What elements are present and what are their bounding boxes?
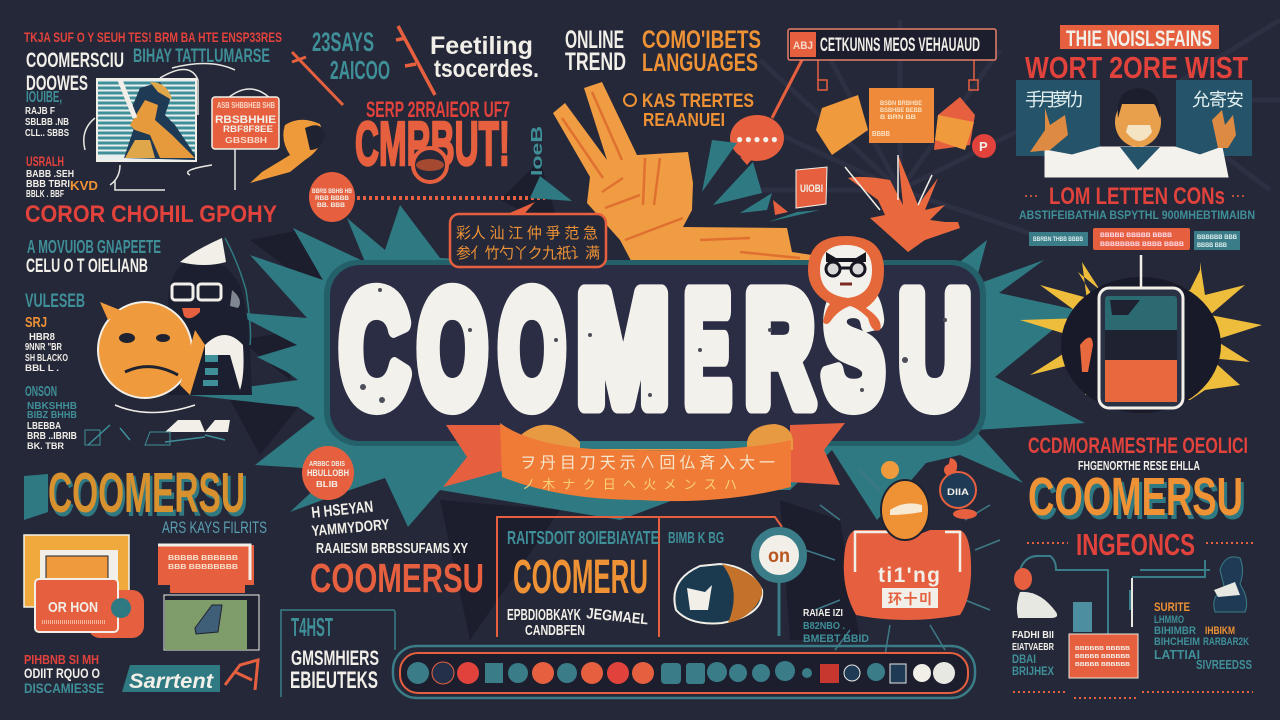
bottom left wordmark: COOMERSU (50, 464, 248, 529)
panel: centre orange wordmark (497, 517, 782, 639)
right text block: LOM LETTEN CONs (1049, 183, 1225, 210)
bottom left notes: DISCAMIE3SE (24, 680, 104, 696)
right lower text notes: SIVREEDSS (1196, 657, 1252, 672)
right text block: ABSTIFEIBATHIA BSPYTHL 900MHEBTIMAIBN (1019, 208, 1255, 222)
main title: S (823, 259, 884, 438)
red bubble with dotted arrow: BB. BBB (317, 203, 346, 209)
bottom left wordmark: COOMERSU (48, 461, 245, 525)
top text: Feetiling (430, 32, 539, 83)
header notes top left: TKJA SUF O Y SEUH TES! BRM BA HTE ENSP33RES (24, 29, 282, 45)
orange info card (1069, 602, 1138, 678)
text notes left: BABB .SEH (26, 169, 74, 180)
text block under heading: NBKSHHB (27, 401, 77, 412)
centre-left slanted text: COOMERSU (310, 555, 484, 601)
panel: THIST: T4HST (291, 612, 333, 642)
orange character with sign (805, 458, 1000, 655)
red dot and tag: P (979, 139, 988, 154)
red note bubble: ARBBC DBIS (309, 461, 345, 468)
top text: languages: REAANUEI (643, 110, 725, 130)
red sign panel (212, 89, 279, 149)
burst headline: CMRBUT! (355, 110, 510, 179)
photo panel (97, 79, 196, 161)
right lower text notes: FADHI BII (1012, 630, 1054, 641)
text notes left: BBLK . BBF (26, 189, 64, 200)
text block under heading: LBEBBA (27, 421, 61, 432)
header bar with legs (772, 29, 996, 118)
three info boxes: BBBB BBB (1197, 243, 1228, 249)
right lower text notes (1012, 600, 1252, 678)
main title: R (745, 259, 814, 438)
three info boxes: BBBBBB BBB (1197, 235, 1238, 241)
panel: THIST (281, 610, 395, 697)
Sarrtent badge: Sarrtent (129, 670, 214, 693)
panel: yellow and coral tablet (24, 535, 144, 638)
panel: chat circle (668, 530, 803, 636)
centre-left slanted text: RAAIESM BRBSSUFAMS XY (316, 540, 468, 557)
document icons: BBBB (872, 131, 890, 138)
section heading: COROR CHOHIL GPOHY (25, 201, 277, 228)
bottom left notes: PIHBNB SI MH (24, 652, 99, 667)
people and connectors (1014, 556, 1247, 640)
text notes left: IOUIBE, (26, 89, 62, 106)
panel: coral and green stack: BBB BBBBBBBB (168, 564, 238, 571)
top text: languages: COMO'IBETS (642, 26, 761, 54)
red sign panel: GBSB8H (225, 136, 267, 145)
panel: centre orange wordmark: EPBDIOBKAYK (507, 607, 581, 624)
document icons: B BRN BB (880, 115, 917, 121)
top text: languages: KAS TRERTES (642, 91, 754, 112)
text notes left: RAJB F (25, 106, 55, 117)
side label: IoeB (529, 126, 546, 176)
central starburst (188, 205, 1085, 527)
text notes left (25, 89, 98, 200)
person panel: 手月 萝 仂 (1025, 90, 1083, 110)
person panel (1016, 80, 1252, 177)
text block under heading: BRB ..IBRIB (27, 431, 77, 442)
document icons: BSBN BRBHBE (880, 101, 922, 107)
small note by character (803, 608, 869, 645)
small note by character: BMEBT BBID (803, 633, 869, 645)
panel: chat circle: BIMB K BG (668, 530, 724, 547)
centre-left slanted text: YAMMYDORY (311, 516, 390, 540)
three info boxes: BBBBBBBB BBBB BBBB (1100, 242, 1185, 248)
main title (324, 259, 986, 446)
three info boxes: BBBBB BBBBB BBBB (1100, 233, 1173, 239)
centre-left slanted text: H HSEYAN (311, 499, 374, 522)
speech bubble: ●●●●● (736, 132, 778, 146)
teal shards (702, 140, 820, 222)
coral hand (845, 155, 960, 252)
panel: centre orange wordmark: CANDBFEN (525, 622, 585, 639)
orange character with sign: DIIA (947, 487, 970, 497)
document icons: BSBHBE BEBB (880, 108, 923, 114)
right lower headline: FHGENORTHE RESE EHLLA (1078, 458, 1200, 473)
orange character with sign: 环 十 미 (888, 591, 932, 607)
text block under heading: VULESEB (25, 291, 85, 312)
red note bubble (302, 446, 354, 500)
right lower text notes: LHMMO (1154, 614, 1184, 626)
orange info card: BBBBBB BBBBB (1075, 646, 1131, 652)
red sign panel: RBF8F8EE (223, 124, 273, 134)
right lower text notes: LATTIAI (1154, 647, 1200, 662)
icon bar (393, 646, 975, 698)
orange hand doodle (250, 120, 325, 183)
right lower text notes: SURITE (1154, 600, 1190, 614)
section heading: ingeoncs (1013, 527, 1253, 698)
red dot and tag: UIOBI (800, 183, 823, 195)
header notes top left: COOMERSCIU (26, 49, 124, 72)
orange character with sign: ti1'ng (878, 564, 940, 587)
top text: online trend: TREND (565, 48, 626, 76)
text block under heading: BK. TBR (27, 441, 65, 451)
mascot with glasses on title (808, 236, 884, 331)
text notes left: BBB TBRI (26, 179, 70, 190)
text notes left: SBLBB .NB (25, 117, 69, 128)
header notes top left: DOOWES (26, 72, 88, 95)
main title: C (340, 259, 409, 438)
right lower text notes: EIATVAEBR (1012, 642, 1055, 653)
right lower text notes: IHBIKM (1205, 625, 1235, 637)
main title: M (577, 259, 669, 438)
main title: O (499, 259, 565, 438)
red sign panel: RBSBHHIE (215, 114, 276, 126)
text block under heading: CELU O T OIELIANB (26, 256, 148, 277)
panel: coral and green stack: BBBBB BBBBBB (168, 555, 238, 562)
bottom left notes (24, 652, 104, 696)
red dot and tag (796, 134, 996, 208)
top text: online trend (565, 26, 626, 76)
main title: U (899, 259, 971, 438)
top centre figures: 2AICOO (330, 55, 390, 85)
red bubble with dotted arrow (309, 172, 572, 222)
header notes top left (24, 29, 282, 95)
ribbon: ノ 木 ナ ク 日 ヘ 火 メ ン ス ハ (522, 477, 737, 492)
panel: centre orange wordmark: COOMERU (513, 551, 648, 604)
text notes left: CLL.. SBBS (25, 128, 69, 139)
burst headline: SERP 2RRAIEOR UF7 (366, 97, 510, 122)
character with glasses and orange blob (85, 238, 252, 445)
right lower text notes: BIHCHEIM (1154, 636, 1200, 648)
bottom left notes: ODIIT RQUO O (24, 665, 100, 681)
right lower headline (1028, 433, 1248, 531)
three info boxes (1029, 228, 1240, 250)
right lower text notes: RARBAR2K (1203, 636, 1249, 648)
text block under heading: HBR8 (29, 332, 55, 343)
text block under heading: BIBZ BHHB (27, 410, 77, 421)
text block under heading: BBL L . (25, 363, 59, 373)
top centre figures: 23SAYS (312, 27, 374, 57)
bottom left wordmark: ARS KAYS FILRITS (162, 518, 267, 537)
red bubble with dotted arrow: RBB BBBB (315, 196, 350, 202)
three info boxes: BBRBN THBB BBBB (1033, 237, 1084, 243)
document icons (816, 88, 975, 155)
big orange hand (553, 82, 812, 273)
bottom left wordmark (24, 461, 267, 537)
small note by character: RAIAE IZI (803, 608, 843, 619)
top text: online trend: ONLINE (565, 26, 624, 54)
panel: yellow and coral tablet: OR HON (48, 599, 98, 616)
header notes top left: BIHAY TATTLUMARSE (133, 46, 270, 67)
orange info card: BBBBB BBBBBB (1075, 654, 1131, 660)
CJK callout box: 彩人 汕 江 仲 爭 范 急 (456, 225, 598, 242)
text block under heading (25, 237, 161, 451)
right lower text notes: BIHIMBR (1154, 625, 1196, 637)
centre-left slanted text (310, 499, 484, 601)
CJK callout box: 参 亻 竹 勺 丫 ク 九 祇 讠 满 (456, 245, 600, 262)
panel: centre orange wordmark: JEGMAEL (586, 605, 649, 628)
CJK callout box (450, 202, 606, 267)
ribbon (443, 423, 845, 501)
text block under heading: SRJ (25, 314, 47, 331)
text notes left: USRALH (26, 153, 64, 169)
line doodles (84, 63, 235, 190)
top text: Feetiling: Feetiling (430, 32, 533, 60)
title tag right: THIE NOISLSFAINS (1066, 26, 1212, 51)
panel: centre orange wordmark: RAITSDOIT 8OIEBIAYATE (507, 528, 659, 548)
text block under heading: 9NNR "BR (25, 342, 63, 353)
header bar with legs: CETKUNNS MEOS VEHAUAUD (820, 35, 980, 56)
small note by character: B82NBO . (803, 621, 845, 632)
Sarrtent badge (122, 660, 258, 693)
main title: O (418, 259, 487, 438)
header bar with legs: ABJ (793, 40, 813, 52)
top text: languages: LANGUAGES (642, 49, 758, 77)
red sign panel: ASB SHBBHEB SHB (217, 101, 275, 110)
red note bubble: BLIB (316, 480, 338, 489)
right lower text notes: BRIJHEX (1012, 664, 1054, 678)
section heading: ingeoncs: INGEONCS (1076, 527, 1195, 562)
orange info card: BBBBB BBBBBB (1075, 662, 1131, 668)
red note bubble: HBULLOBH (307, 468, 349, 478)
red bubble with dotted arrow: BBRB BBHB HB (312, 189, 353, 195)
text notes left: KVD (70, 178, 98, 193)
top text: languages (624, 26, 761, 130)
panel: chat circle: on (768, 546, 790, 567)
ribbon: ヲ 丹 目 刀 天 示 ∧ 回 仏 斉 入 大 一 (520, 454, 775, 472)
text block under heading: SH BLACKO (25, 353, 68, 364)
right text block (1019, 183, 1255, 222)
top text: Feetiling: tsocerdes. (434, 55, 539, 83)
text block under heading: A MOVUIOB GNAPEETE (27, 237, 161, 257)
main title: E (684, 259, 731, 438)
panel: THIST: EBIEUTEKS (290, 667, 378, 694)
panel: THIST: GMSMHIERS (291, 647, 379, 670)
panel: coral and green stack (158, 545, 259, 650)
speech bubble (730, 115, 784, 165)
top centre figures (292, 26, 435, 105)
text block under heading: ONSON (25, 383, 57, 400)
phone with burst (1020, 255, 1262, 413)
person panel: 允 寄 安 (1192, 90, 1244, 110)
right lower text notes: DBAI (1012, 652, 1036, 666)
burst headline (355, 97, 510, 182)
